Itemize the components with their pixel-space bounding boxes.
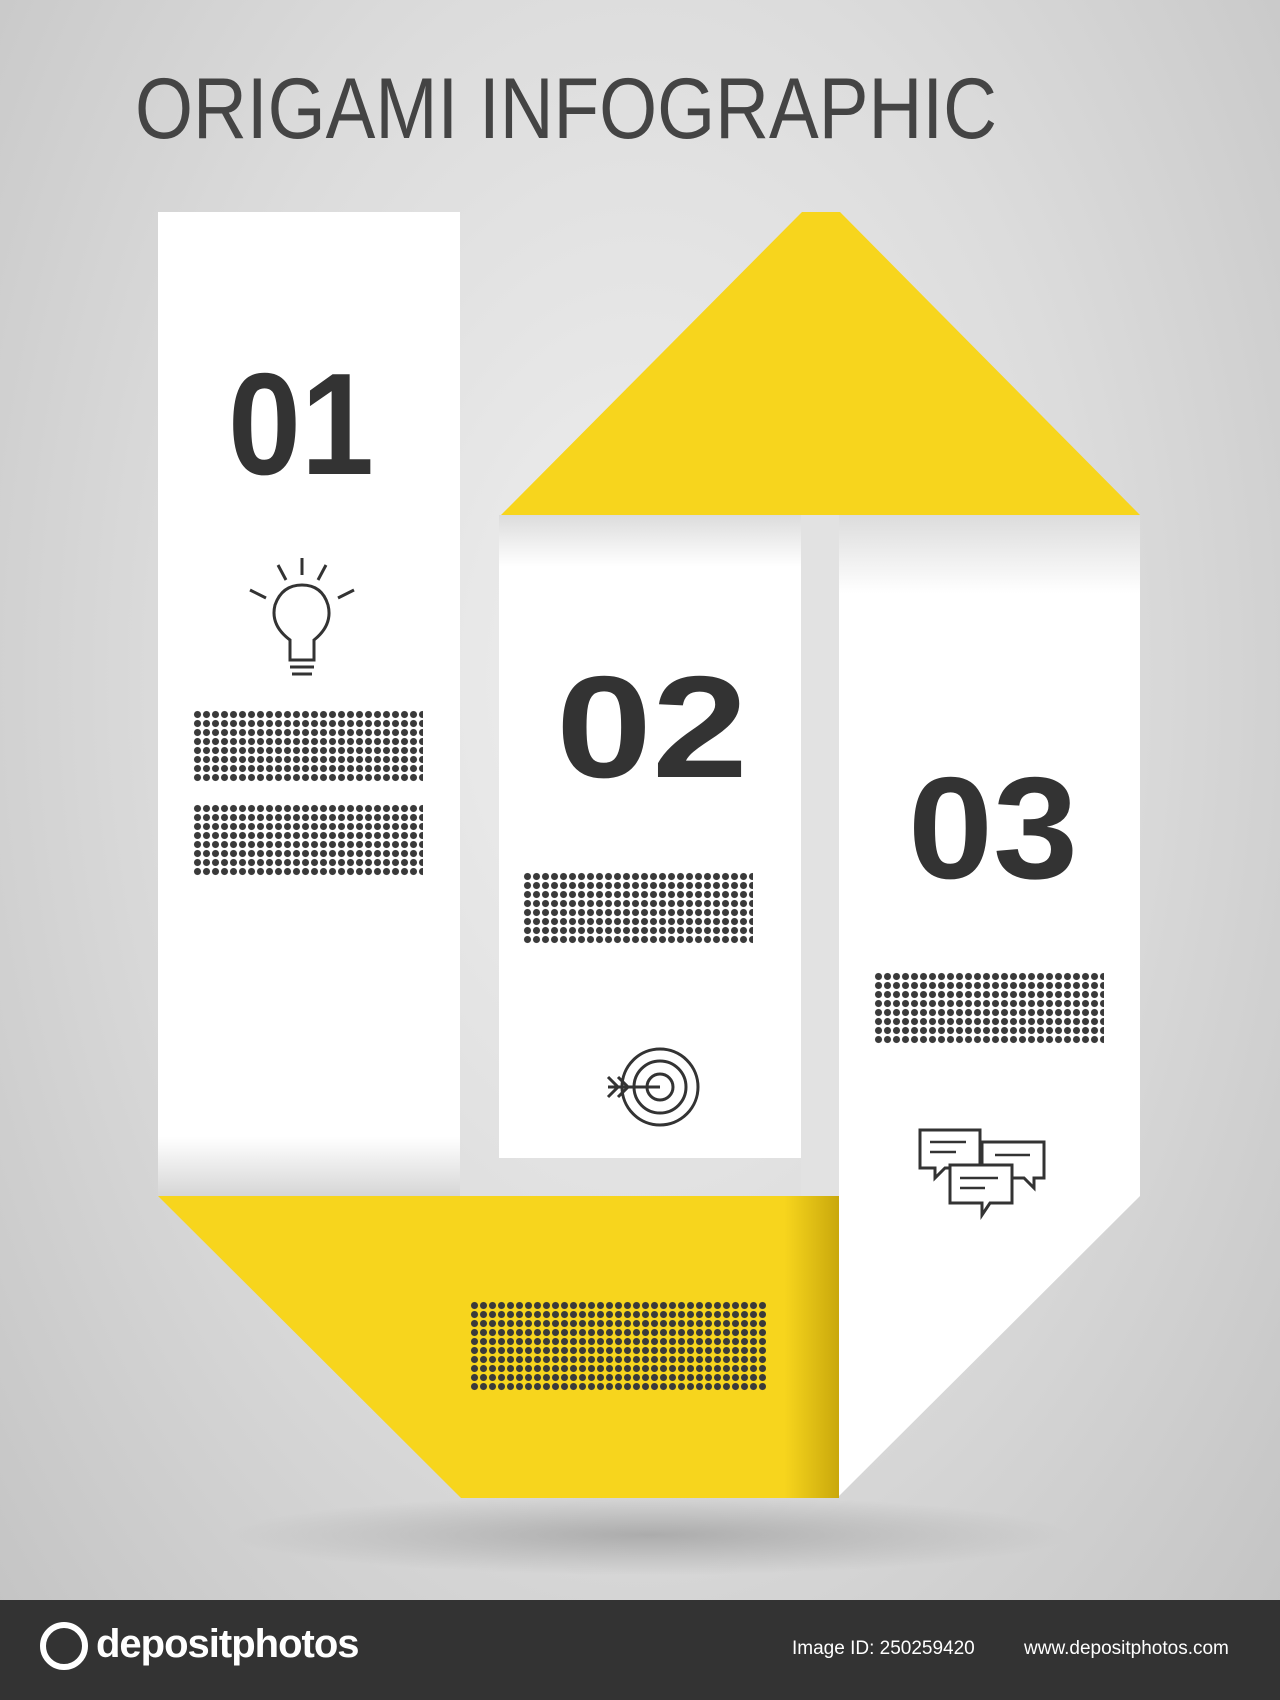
footer logo: depositphotos <box>96 1622 359 1666</box>
shadow <box>230 1495 1070 1575</box>
panel: 03 <box>839 515 1140 1496</box>
text block 2 <box>523 872 753 944</box>
panel: 01 <box>158 212 460 1196</box>
text block 1b <box>193 804 423 876</box>
footer <box>0 1600 1280 1700</box>
number 01: 01 <box>228 343 374 505</box>
footer url: www.depositphotos.com <box>1024 1638 1229 1659</box>
yellow top triangle <box>501 212 1140 515</box>
gap strip <box>801 515 839 1196</box>
icon: target <box>608 1049 698 1125</box>
number 03: 03 <box>908 747 1078 909</box>
title: ORIGAMI INFOGRAPHIC <box>135 61 997 157</box>
yellow bottom band <box>158 1196 839 1498</box>
text block 3 <box>874 972 1104 1044</box>
icon: chat <box>920 1130 1044 1215</box>
footer image id: Image ID: 250259420 <box>792 1638 975 1659</box>
icon: lightbulb <box>250 558 354 674</box>
panel: 02 <box>499 515 801 1158</box>
text block 1a <box>193 710 423 782</box>
number 02: 02 <box>556 646 748 808</box>
text block bottom <box>470 1301 766 1391</box>
